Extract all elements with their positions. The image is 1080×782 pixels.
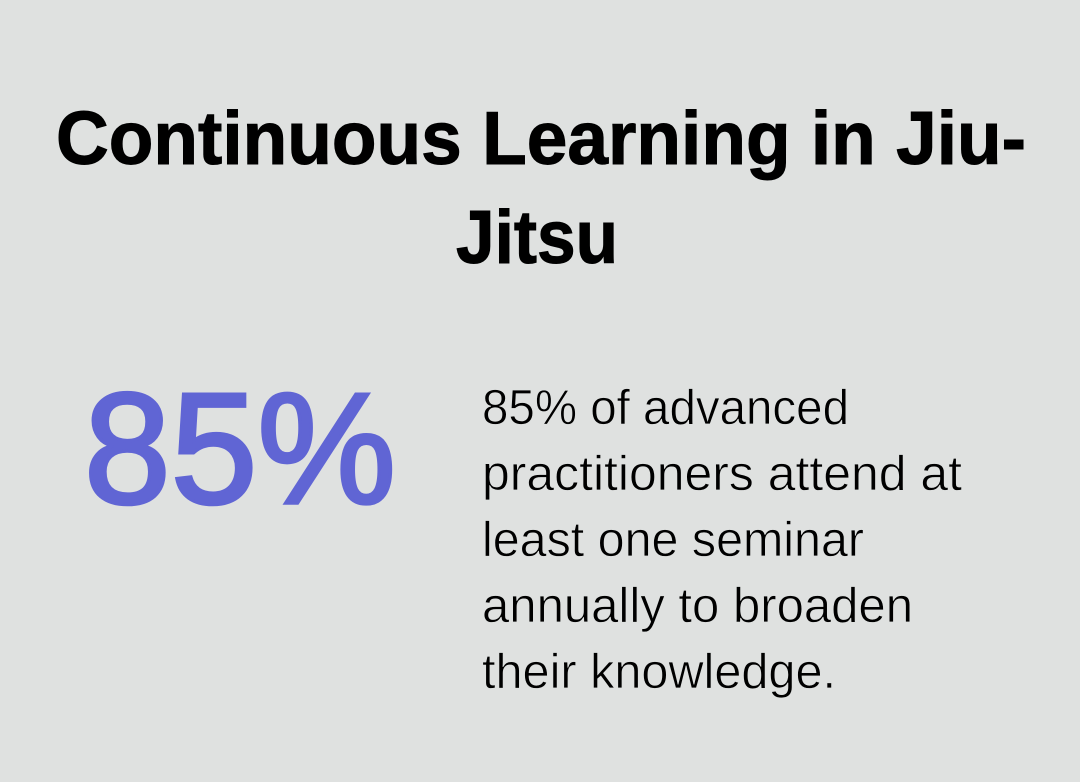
- stat description: 85% of advanced: [482, 381, 849, 435]
- stat description: annually to broaden: [482, 579, 913, 633]
- title: Continuous Learning in Jiu-: [56, 96, 1026, 180]
- big stat: 85%: 85%: [84, 361, 396, 537]
- title: [56, 96, 1026, 279]
- stat description: practitioners attend at: [482, 447, 962, 501]
- stat description: their knowledge.: [482, 645, 836, 699]
- title: Jitsu: [456, 195, 618, 279]
- stat description: least one seminar: [482, 513, 864, 567]
- stat description: [482, 381, 962, 699]
